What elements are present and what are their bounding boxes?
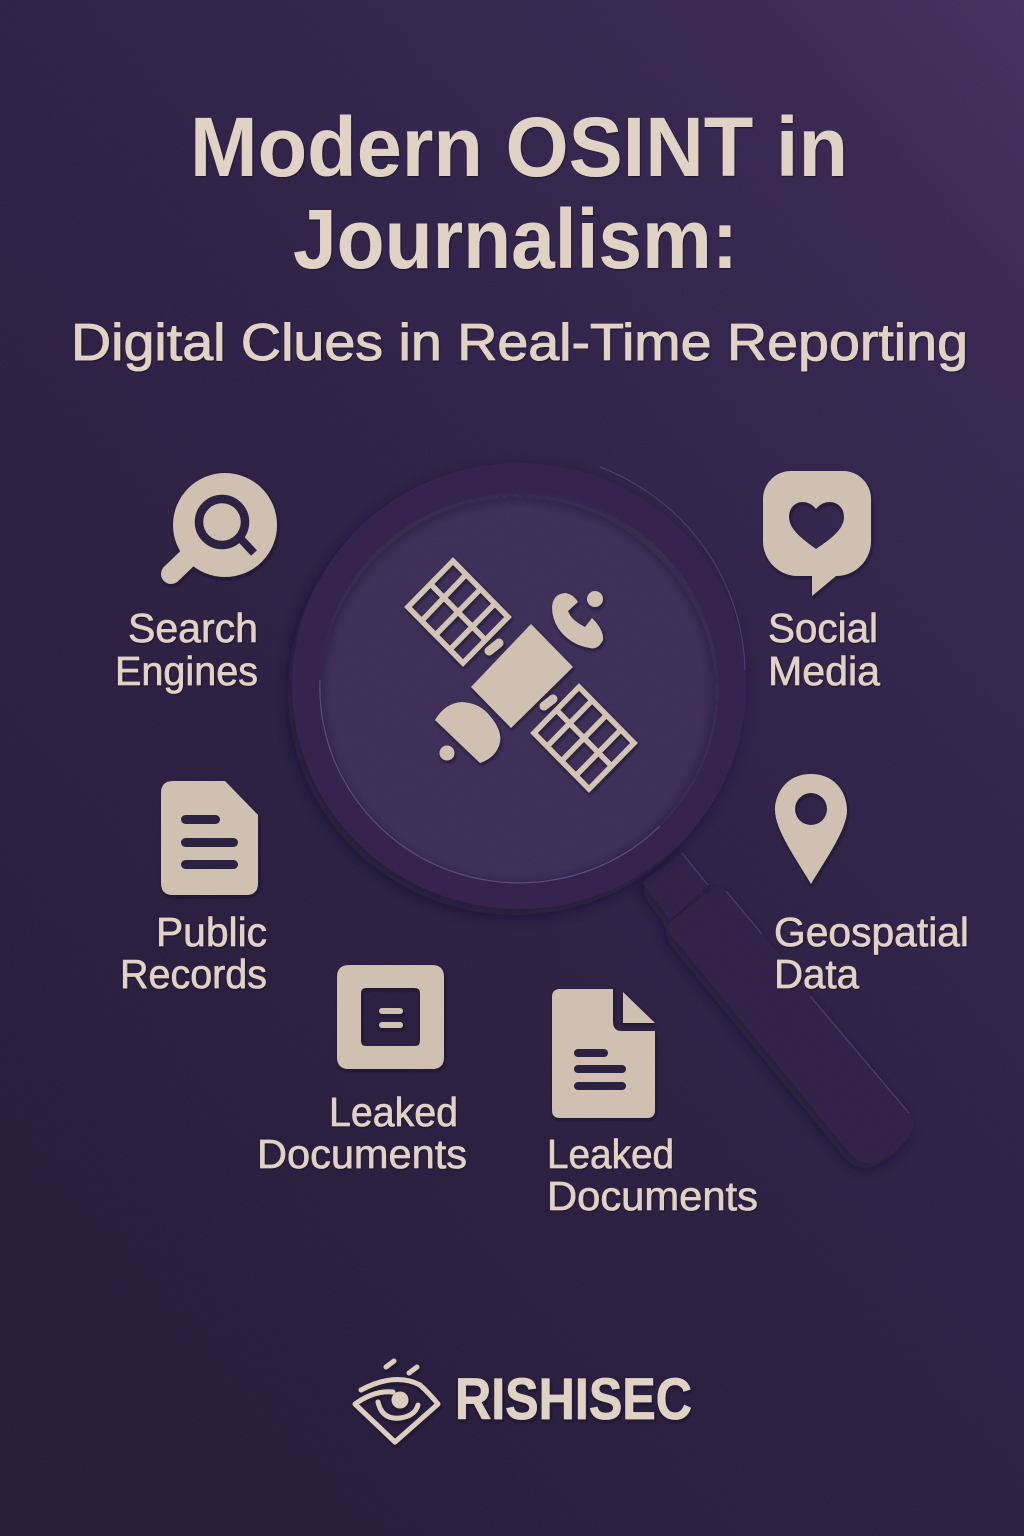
item: leaked documents right [547,989,758,1219]
icon: satellite [408,561,634,789]
label: Social [768,605,878,651]
label: Leaked [547,1131,674,1177]
satellite body [471,624,573,728]
magnifier lens [318,467,745,887]
brand name: RISHISEC [455,1367,692,1432]
label [768,605,880,694]
item: search engines [115,473,277,694]
magnifier ring [292,463,746,909]
logo [355,1361,692,1442]
icon: eye [355,1361,438,1442]
satellite lower dish [435,702,500,763]
title [190,100,848,286]
label: Public [156,909,267,955]
icon: speech bubble heart [763,471,871,596]
item: leaked documents left [257,965,467,1177]
icon: framed document [337,965,444,1069]
subtitle: Digital Clues in Real-Time Reporting [71,314,968,372]
item: social media [763,471,880,694]
label [774,909,969,997]
label [120,909,267,997]
satellite connectors [489,643,553,706]
label: Engines [115,648,258,694]
label: Documents [257,1131,467,1177]
label: Data [774,951,859,997]
magnifier handle [642,853,913,1163]
label: Search [128,605,258,651]
item: geospatial data [774,774,969,997]
label: Media [768,648,880,694]
icon: map pin [775,774,847,884]
icon: folded document [552,989,655,1118]
item: public records [120,781,267,997]
label [257,1089,467,1177]
icon: search [171,473,277,577]
title: Modern OSINT in [190,100,848,194]
label: Leaked [329,1089,458,1135]
title: Journalism: [293,192,738,286]
satellite lower solar panel [534,687,634,789]
label [547,1131,758,1219]
satellite top dish [552,593,603,648]
magnifying glass [292,463,913,1163]
label [115,605,258,694]
label: Documents [547,1173,758,1219]
label: Geospatial [774,909,969,955]
icon: document [161,781,258,895]
satellite upper solar panel [408,561,508,663]
label: Records [120,951,267,997]
